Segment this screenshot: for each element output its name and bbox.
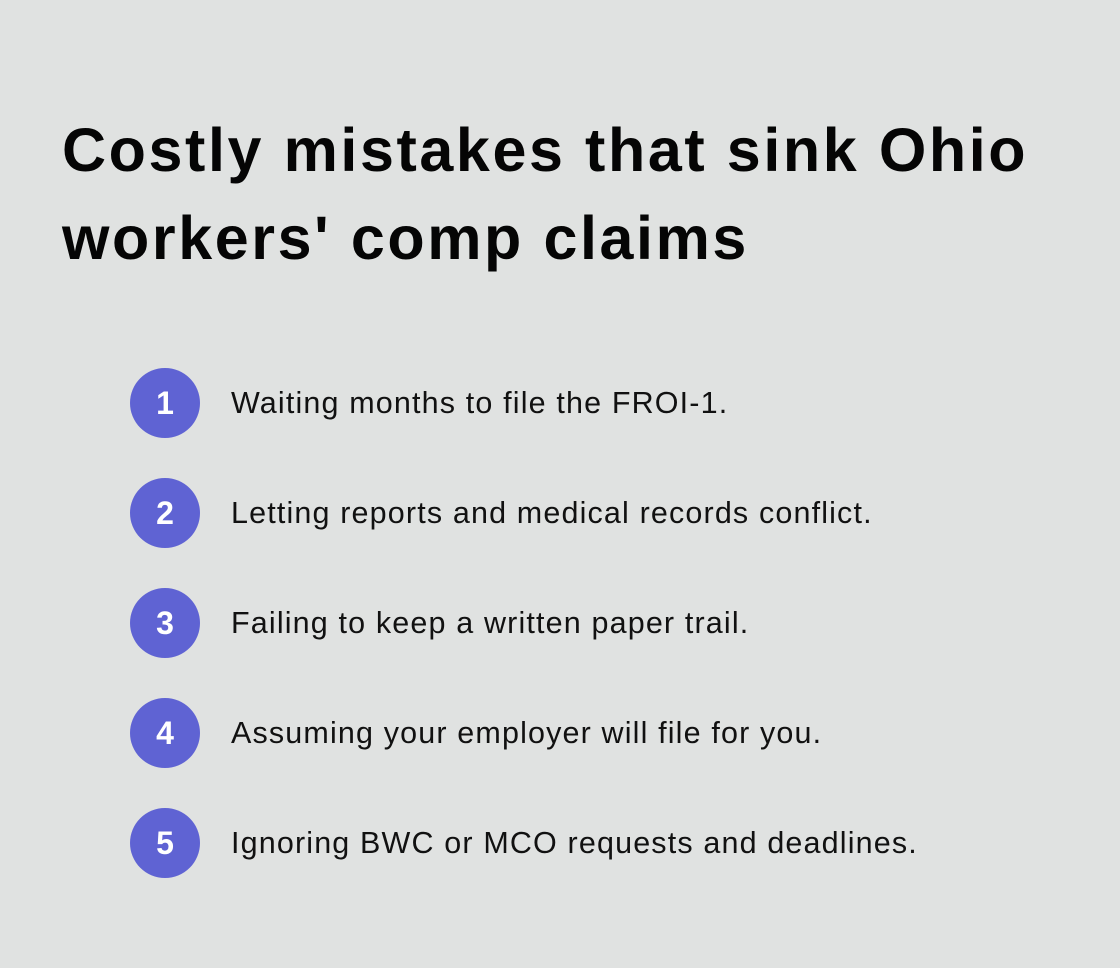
numbered list — [130, 368, 918, 878]
title: Costly mistakes that sink Ohio — [62, 116, 1028, 184]
icon: number 5 circle: 5 — [156, 825, 174, 861]
icon: number 4 circle — [130, 698, 200, 768]
icon: number 1 circle — [130, 368, 200, 438]
text: item 5: Ignoring BWC or MCO requests and deadlines. — [231, 826, 918, 860]
icon: number 4 circle: 4 — [156, 715, 174, 751]
text: item 1: Waiting months to file the FROI-1. — [231, 386, 728, 420]
title: workers' comp claims — [62, 204, 749, 272]
item 4 — [130, 698, 822, 768]
icon: number 3 circle — [130, 588, 200, 658]
icon: number 5 circle — [130, 808, 200, 878]
item 2 — [130, 478, 873, 548]
icon: number 1 circle: 1 — [156, 385, 174, 421]
item 1 — [130, 368, 728, 438]
title — [62, 116, 1028, 272]
icon: number 2 circle — [130, 478, 200, 548]
icon: number 3 circle: 3 — [156, 605, 174, 641]
text: item 4: Assuming your employer will file for you. — [231, 716, 822, 750]
item 3 — [130, 588, 749, 658]
text: item 3: Failing to keep a written paper trail. — [231, 606, 749, 640]
item 5 — [130, 808, 918, 878]
icon: number 2 circle: 2 — [156, 495, 174, 531]
text: item 2: Letting reports and medical records conflict. — [231, 496, 873, 530]
